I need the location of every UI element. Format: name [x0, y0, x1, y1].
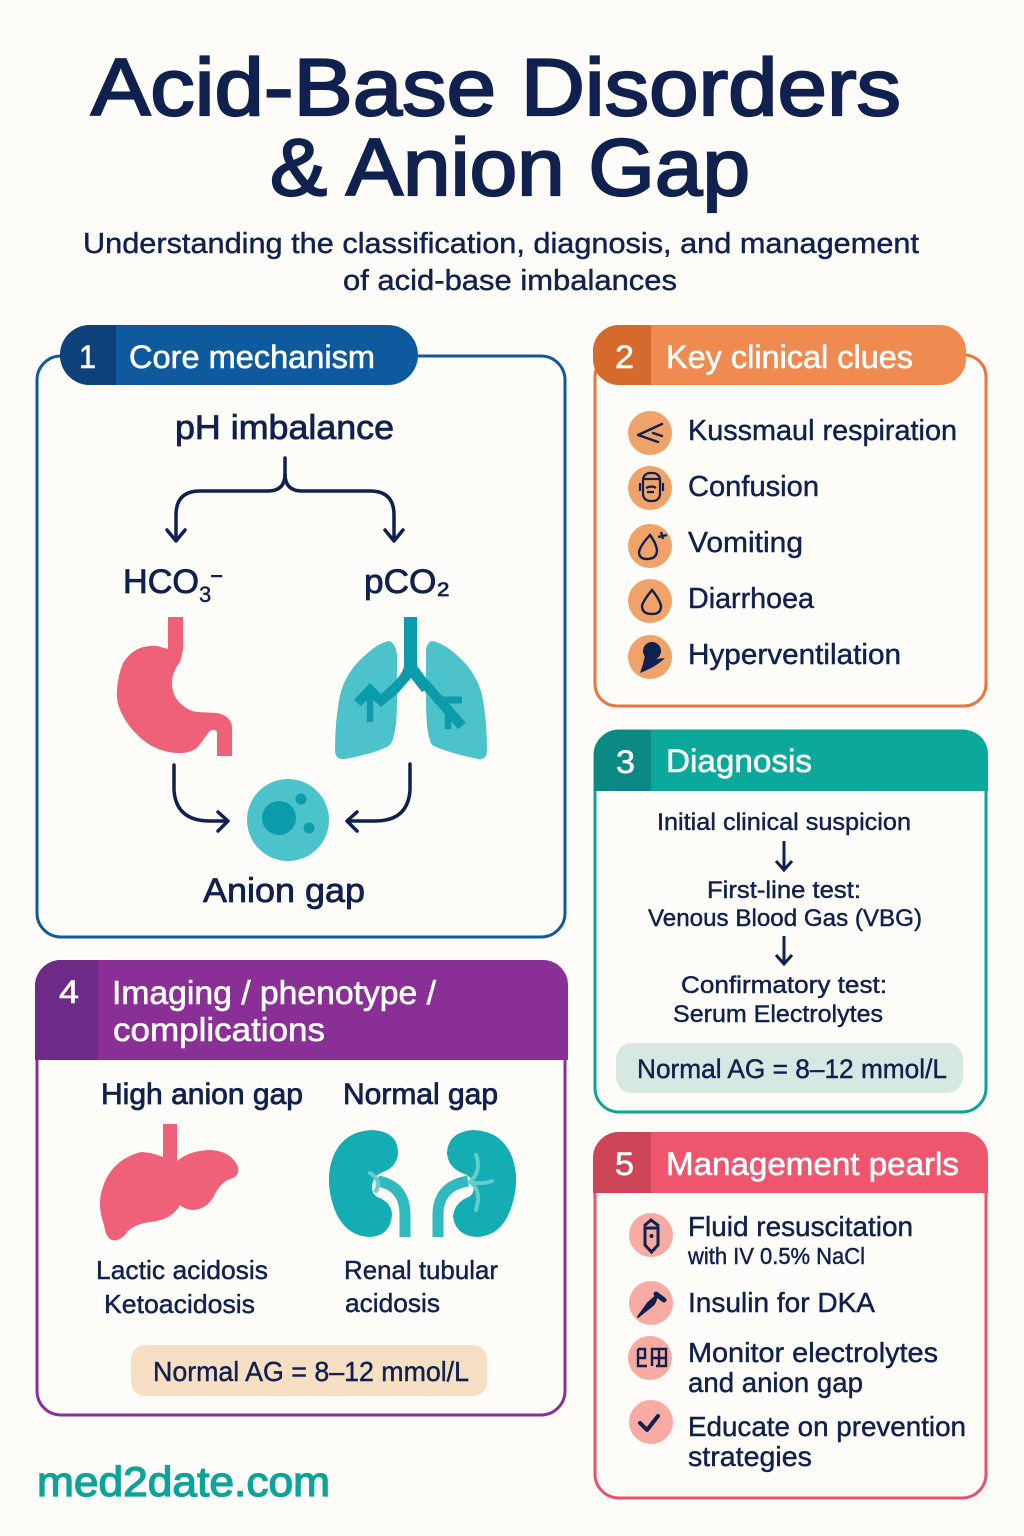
label: anion gap: Anion gap	[203, 872, 365, 910]
text: first-line test: First-line test:	[707, 877, 861, 904]
text: lactic acidosis, ketoacidosis	[96, 1255, 268, 1319]
header: imaging: 4	[59, 974, 79, 1010]
header: management pearls	[593, 1132, 988, 1193]
item: monitor electrolytes	[628, 1336, 938, 1398]
icon: kidneys	[329, 1130, 516, 1237]
item: fluid resuscitation: Fluid resuscitation	[688, 1211, 913, 1242]
icon: stomach	[117, 617, 232, 756]
text: renal tubular acidosis	[344, 1255, 498, 1318]
panel: core mechanism	[37, 325, 565, 937]
title	[91, 43, 901, 213]
heading: high anion gap: High anion gap	[101, 1078, 303, 1111]
label: HCO3-: HCO	[123, 563, 199, 601]
arrow: down	[776, 841, 792, 870]
text: first-line test: Venous Blood Gas (VBG)	[648, 905, 922, 932]
title: & Anion Gap	[270, 123, 750, 213]
item: monitor electrolytes: and anion gap	[688, 1367, 863, 1398]
label: pCO2: pCO₂	[364, 563, 450, 601]
item: Hyperventilation: Hyperventilation	[688, 639, 901, 671]
item: fluid resuscitation	[629, 1211, 913, 1269]
item: Hyperventilation	[628, 635, 901, 679]
header: management pearls: 5	[615, 1146, 634, 1182]
header: key clinical clues: 2	[615, 339, 634, 375]
callout: normal AG: Normal AG = 8–12 mmol/L	[637, 1054, 947, 1084]
header: imaging: Imaging / phenotype /	[112, 974, 437, 1011]
header: core mechanism	[60, 325, 418, 385]
item: Vomiting: Vomiting	[688, 527, 803, 559]
arrow: stomach to anion gap	[174, 765, 228, 831]
text: first-line test	[648, 877, 922, 932]
logo: med2date.com: med2date.com	[37, 1458, 330, 1505]
heading: normal gap: Normal gap	[343, 1078, 498, 1111]
header: imaging	[35, 960, 568, 1060]
item: Diarrhoea	[628, 579, 815, 623]
arrow: branching bracket	[167, 458, 403, 541]
header: diagnosis	[594, 730, 988, 791]
arrow: down	[776, 936, 792, 964]
label: HCO3-: 3	[199, 582, 211, 607]
text: lactic acidosis, ketoacidosis: Ketoacidosis	[104, 1289, 255, 1319]
header: diagnosis: 3	[616, 744, 635, 780]
header: imaging: complications	[113, 1011, 325, 1048]
item: insulin for DKA: Insulin for DKA	[688, 1287, 875, 1318]
header: management pearls: Management pearls	[666, 1146, 959, 1182]
item: educate on prevention: Educate on prevention	[688, 1411, 966, 1442]
item: educate on prevention: strategies	[688, 1441, 812, 1472]
header: key clinical clues	[593, 325, 966, 385]
callout: normal AG	[131, 1345, 487, 1396]
callout: normal AG: Normal AG = 8–12 mmol/L	[153, 1356, 469, 1387]
callout: normal AG	[616, 1043, 963, 1093]
text: confirmatory test: Confirmatory test:	[681, 972, 887, 999]
subtitle: Understanding the classification, diagnosis, and management	[83, 228, 919, 260]
label: HCO3-: −	[210, 563, 223, 590]
arrow: lungs to anion gap	[347, 764, 410, 831]
text: renal tubular acidosis: Renal tubular	[344, 1255, 498, 1285]
label: HCO3-	[123, 563, 223, 607]
header: diagnosis: Diagnosis	[666, 743, 812, 779]
item: Vomiting	[628, 524, 803, 568]
subtitle	[83, 228, 919, 297]
text: confirmatory test	[673, 972, 887, 1028]
header: core mechanism: 1	[79, 339, 96, 375]
text: confirmatory test: Serum Electrolytes	[673, 1001, 883, 1028]
header: key clinical clues: Key clinical clues	[666, 339, 913, 375]
heading: pH imbalance: pH imbalance	[175, 409, 394, 447]
item: Kussmaul respiration: Kussmaul respiration	[688, 415, 957, 447]
subtitle: of acid-base imbalances	[343, 265, 677, 297]
item: educate on prevention	[629, 1400, 966, 1472]
header: core mechanism: Core mechanism	[129, 339, 375, 375]
panel: key clinical clues	[593, 325, 986, 706]
item: Diarrhoea: Diarrhoea	[688, 583, 815, 615]
item: Confusion: Confusion	[688, 471, 819, 503]
item: fluid resuscitation: with IV 0.5% NaCl	[687, 1243, 865, 1269]
title: Acid-Base Disorders	[91, 43, 901, 133]
item: Confusion	[628, 466, 819, 510]
item: monitor electrolytes: Monitor electrolytes	[688, 1337, 938, 1368]
item: insulin for DKA	[629, 1281, 875, 1325]
icon: anion gap cell	[247, 779, 329, 861]
text: renal tubular acidosis: acidosis	[345, 1288, 440, 1318]
panel: management pearls	[593, 1132, 988, 1498]
icon: liver	[100, 1124, 238, 1240]
panel: diagnosis	[594, 730, 988, 1112]
item: Kussmaul respiration	[628, 411, 957, 455]
text: initial clinical suspicion: Initial clinical suspicion	[657, 809, 911, 836]
text: lactic acidosis, ketoacidosis: Lactic acidosis	[96, 1255, 268, 1285]
icon: lungs	[335, 617, 487, 759]
panel: imaging / phenotype / complications	[35, 960, 568, 1415]
